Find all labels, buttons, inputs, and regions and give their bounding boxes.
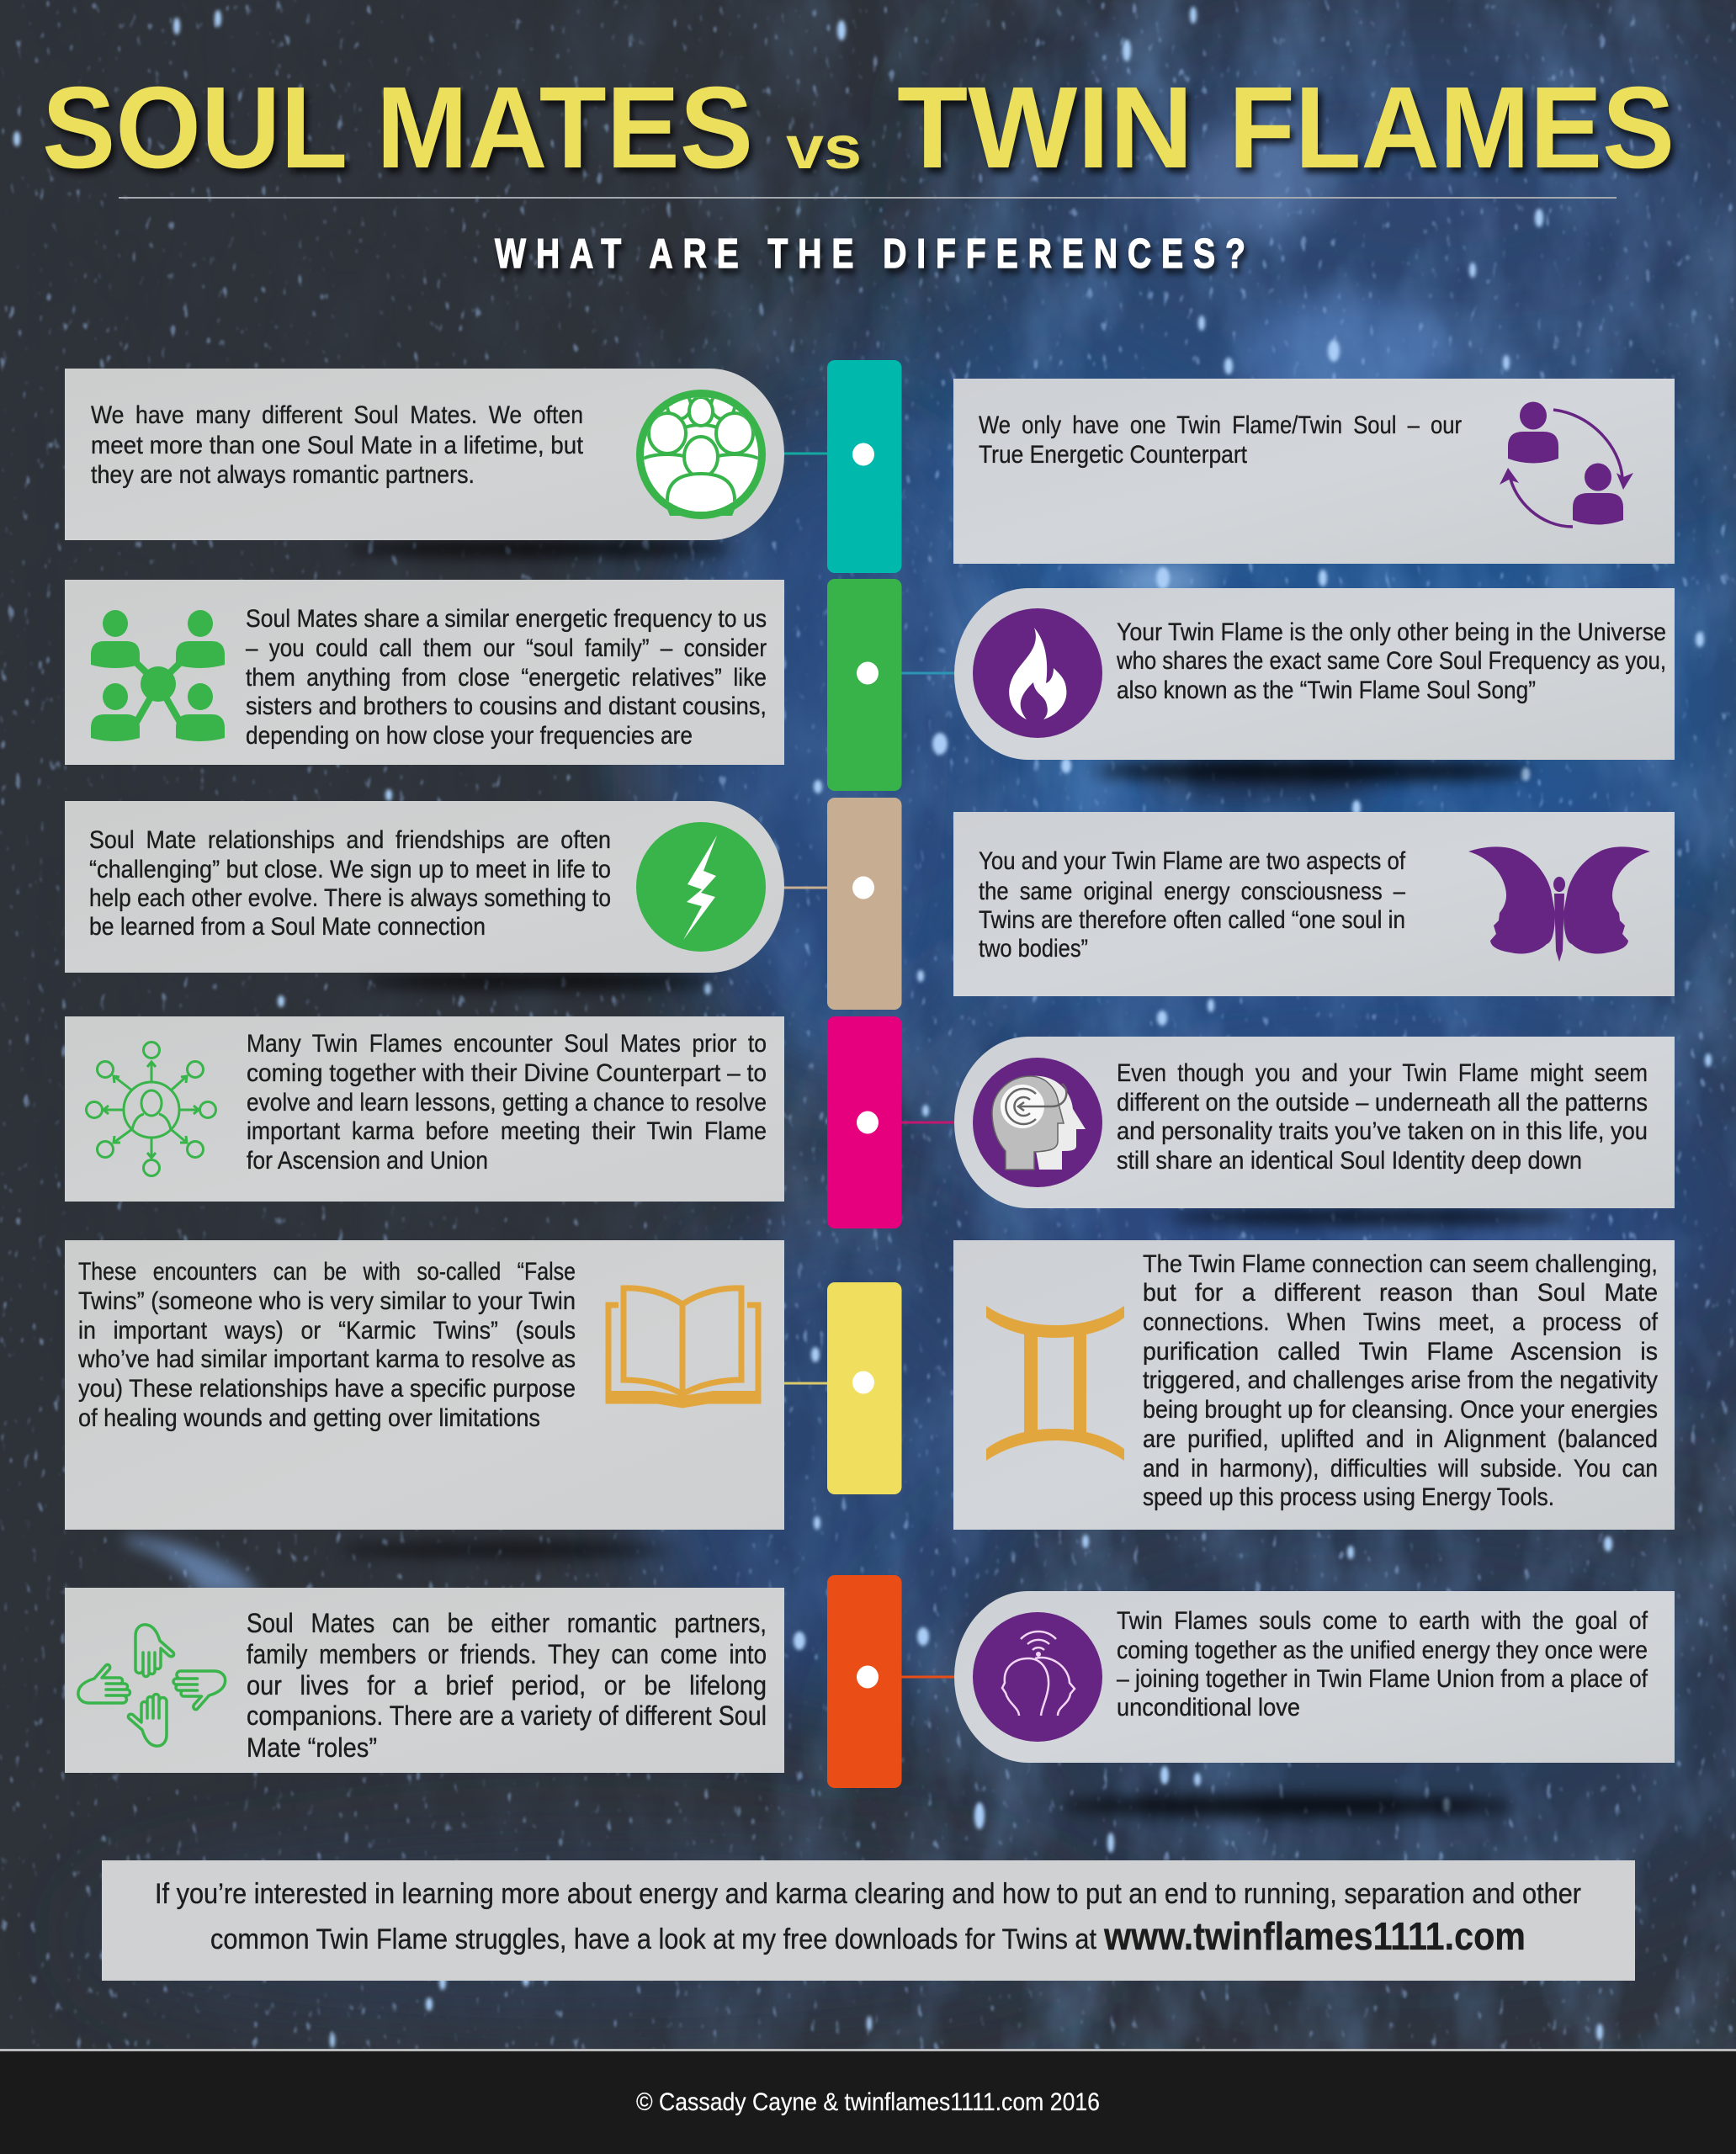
text: Soul Mate relationships and friendships are often (89, 826, 611, 854)
panel: two aspects (953, 812, 1675, 996)
text: our lives for a brief period, or be lifelong (247, 1670, 767, 1700)
icon: open book (608, 1288, 758, 1405)
title (42, 63, 1675, 193)
panel: energetic frequency (65, 580, 784, 765)
panel: many twin flames encounter (65, 1016, 784, 1202)
text: for Ascension and Union (247, 1147, 488, 1175)
title: FLAMES (1229, 63, 1675, 193)
bar 1 teal (827, 360, 902, 573)
text (77, 1258, 576, 1432)
icon: gemini symbol (986, 1306, 1124, 1461)
subtitle: WHAT ARE THE DIFFERENCES? (495, 231, 1245, 277)
bar 4 pink (827, 1016, 902, 1228)
text: family members or friends. They can come into (247, 1639, 767, 1669)
panel: call to action (102, 1860, 1635, 1981)
bar 6 orange (827, 1575, 902, 1788)
text: them anything from close “energetic relatives” like (246, 664, 767, 692)
text: Twin Flames souls come to earth with the goal of (1117, 1607, 1648, 1635)
text: in important ways) or “Karmic Twins” (souls (78, 1317, 576, 1345)
icon: connected people (91, 610, 225, 741)
panel: only other being (954, 588, 1675, 760)
icon: four hands (78, 1625, 226, 1746)
title: TWIN (897, 63, 1193, 193)
text (1116, 618, 1666, 704)
text: also known as the “Twin Flame Soul Song” (1117, 676, 1536, 704)
panel: twin flame ascension (953, 1240, 1675, 1530)
text: meet more than one Soul Mate in a lifetime, but (91, 432, 584, 459)
panel: twin flame union (954, 1591, 1675, 1763)
text: speed up this process using Energy Tools. (1143, 1483, 1554, 1511)
text: two bodies” (979, 935, 1088, 963)
text: Twins are therefore often called “one soul in (979, 906, 1405, 934)
icon: two people cycle (1500, 402, 1633, 527)
title: vs (786, 114, 862, 182)
text: but for a different reason than Soul Mate (1143, 1279, 1658, 1307)
text (247, 1030, 767, 1175)
text: – joining together in Twin Flame Union from a place of (1117, 1665, 1648, 1693)
central colour bars (783, 360, 956, 1788)
text: be learned from a Soul Mate connection (89, 913, 486, 941)
text: Mate “roles” (247, 1732, 377, 1763)
text: companions. There are a variety of different Soul (247, 1700, 767, 1731)
text: Even though you and your Twin Flame might seem (1117, 1059, 1648, 1087)
text (246, 605, 767, 750)
panel: false and karmic twins (65, 1240, 784, 1530)
text: coming together as the unified energy they once were (1117, 1637, 1648, 1664)
text (247, 1608, 767, 1763)
text: – you could call them our “soul family” – consider (246, 634, 767, 662)
text: Twins” (someone who is very similar to your Twin (78, 1287, 576, 1315)
panel: challenging relationships (65, 801, 784, 973)
icon: lightning bolt (636, 822, 766, 952)
text: “challenging” but close. We sign up to meet in life to (89, 856, 611, 883)
call to action text: www.twinflames1111.com (1103, 1914, 1526, 1958)
text: still share an identical Soul Identity deep down (1117, 1147, 1582, 1175)
text: they are not always romantic partners. (91, 461, 475, 489)
bar 3 tan (827, 798, 902, 1010)
connector lines (783, 454, 956, 1677)
text: and personality traits you’ve taken on in this life, you (1117, 1117, 1648, 1145)
text: You and your Twin Flame are two aspects of (979, 847, 1406, 875)
text (1117, 1607, 1648, 1722)
text: sisters and brothers to cousins and distant cousins, (246, 692, 767, 720)
text: you) These relationships have a specific purpose (78, 1375, 576, 1403)
icon: person radiating arrows (86, 1042, 215, 1176)
text: being brought up for cleansing. Once your energies (1143, 1396, 1658, 1424)
text (979, 411, 1462, 469)
text: are purified, uplifted and in Alignment (balanced (1143, 1425, 1658, 1453)
call to action text: common Twin Flame struggles, have a look at my free downloads for Twins at (210, 1923, 1096, 1955)
icon: group of people (636, 390, 766, 519)
text (1143, 1250, 1659, 1511)
text: The Twin Flame connection can seem challenging, (1143, 1250, 1658, 1278)
text: coming together with their Divine Counterpart – to (247, 1059, 767, 1087)
text: Soul Mates share a similar energetic frequency to us (246, 605, 767, 633)
text: who’ve had similar important karma to resolve as (77, 1345, 576, 1373)
panel: roles of soul mates (65, 1588, 784, 1773)
call to action text: If you’re interested in learning more about energy and karma clearing and how to put an end to running, separation and other (155, 1878, 1581, 1910)
text: help each other evolve. There is always something to (89, 884, 611, 912)
text: different on the outside – underneath all the patterns (1117, 1089, 1648, 1117)
text (91, 401, 584, 489)
text: and in harmony), difficulties will subside. You can (1143, 1455, 1658, 1483)
panel: one twin flame (953, 379, 1675, 564)
bar 5 yellow (827, 1282, 902, 1494)
footer (0, 2049, 1736, 2154)
text: True Energetic Counterpart (979, 441, 1248, 469)
panel: soul mates many (65, 369, 784, 540)
text (979, 847, 1406, 963)
text: Many Twin Flames encounter Soul Mates prior to (247, 1030, 767, 1058)
title: SOUL MATES (42, 63, 753, 193)
bar 2 green (827, 579, 902, 791)
icon: flame (973, 608, 1102, 738)
icon: two heads with target (973, 1058, 1102, 1187)
text (89, 826, 611, 941)
icon: butterfly with faces (1468, 846, 1650, 962)
panel: identical soul identity (954, 1037, 1675, 1208)
text: of healing wounds and getting over limitations (78, 1404, 540, 1432)
text: the same original energy consciousness – (979, 878, 1405, 905)
text: Soul Mates can be either romantic partners, (247, 1608, 767, 1638)
text: connections. When Twins meet, a process of (1143, 1308, 1659, 1336)
text: important karma before meeting their Twin Flame (247, 1117, 767, 1145)
call to action text (155, 1878, 1581, 1958)
text: triggered, and challenges arise from the negativity (1143, 1366, 1658, 1394)
copyright: © Cassady Cayne & twinflames1111.com 2016 (636, 2088, 1100, 2116)
text: unconditional love (1117, 1694, 1300, 1722)
text: These encounters can be with so-called “False (78, 1258, 576, 1286)
text: We have many different Soul Mates. We often (91, 401, 583, 429)
text: Your Twin Flame is the only other being in the Universe (1117, 618, 1666, 646)
icon: joined heads with signal (973, 1612, 1102, 1742)
text: We only have one Twin Flame/Twin Soul – our (979, 411, 1462, 439)
text (1117, 1059, 1648, 1175)
text: purification called Twin Flame Ascension is (1143, 1338, 1658, 1366)
text: depending on how close your frequencies are (246, 722, 693, 750)
text: evolve and learn lessons, getting a chance to resolve (247, 1089, 767, 1117)
